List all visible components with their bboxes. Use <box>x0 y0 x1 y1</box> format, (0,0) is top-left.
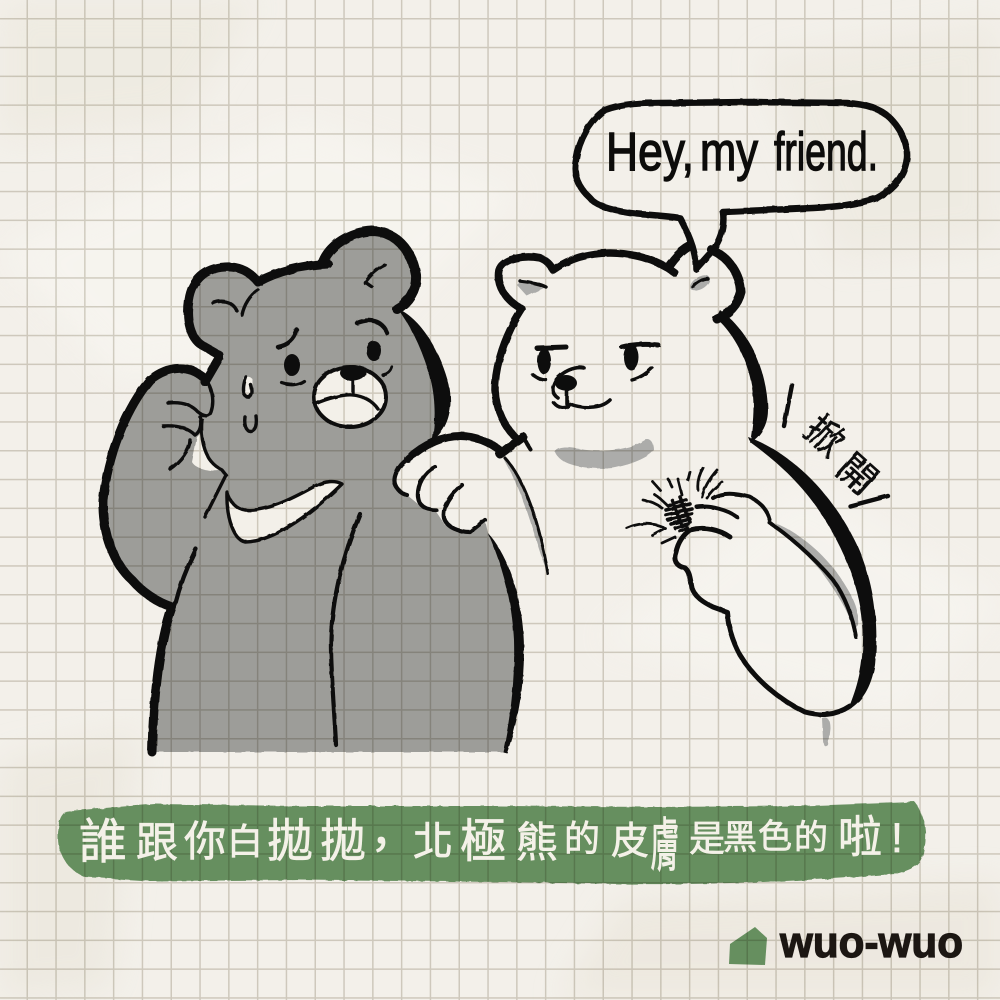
mouth <box>315 376 378 409</box>
caption text: 拋 <box>267 815 313 867</box>
speech bubble text: my <box>700 122 758 182</box>
tears <box>244 377 256 431</box>
ear marks <box>520 279 708 287</box>
caption text: 你 <box>184 818 226 865</box>
forearm thin line <box>505 458 548 574</box>
inner ear strokes <box>213 265 385 315</box>
caption text: 拋 <box>320 815 366 867</box>
logo house icon <box>729 927 767 965</box>
caption text: 熊 <box>516 819 558 866</box>
caption text: 是 <box>689 818 725 859</box>
arm tie line <box>500 437 523 454</box>
eye creases <box>533 368 652 380</box>
nose <box>555 375 577 391</box>
sound effect text: 掀 <box>796 408 852 465</box>
pulled chest hair scribble <box>666 497 692 531</box>
black bear line art <box>103 231 524 753</box>
speech bubble outline <box>575 102 907 269</box>
raised arm and body left outline <box>103 368 203 752</box>
left ear and head outline <box>495 253 675 440</box>
caption text: 誰 <box>79 816 127 869</box>
fist fingers <box>697 494 856 637</box>
right ear <box>670 246 741 319</box>
hand top thick line <box>408 436 502 459</box>
muzzle <box>314 367 386 427</box>
caption text: ! <box>891 814 903 861</box>
eyes <box>537 344 638 374</box>
sound effect text: 開 <box>828 446 884 503</box>
left ear <box>188 264 328 382</box>
belly and armpit lines <box>175 514 360 745</box>
speech bubble text: Hey, <box>606 122 694 182</box>
arm tick <box>523 437 531 450</box>
brows <box>537 344 658 348</box>
caption text: 黑 <box>723 819 757 857</box>
caption text: 的 <box>794 819 828 857</box>
green caption banner shape <box>58 802 926 884</box>
right ear <box>323 231 416 309</box>
fist fingers <box>163 377 226 517</box>
head right thick outline <box>716 310 768 443</box>
body right thick outline <box>488 533 524 753</box>
caption text: 膚 <box>650 813 680 879</box>
white bear line art <box>395 246 888 714</box>
caption text: 的 <box>564 818 600 859</box>
caption text: 極 <box>460 815 506 867</box>
caption text: 北 <box>413 820 453 864</box>
caption text: 跟 <box>136 819 178 866</box>
eye creases <box>282 367 392 385</box>
white patches: chest crescent, hand gap, muzzle <box>192 367 386 542</box>
chest crescent outline <box>227 482 342 542</box>
arm bottom outline <box>675 528 850 714</box>
speech bubble text <box>606 122 878 182</box>
head right thick outline <box>398 309 451 441</box>
caption text: ， <box>359 821 403 870</box>
nose <box>340 365 366 381</box>
radiating hair strokes <box>627 468 722 543</box>
caption text: 色 <box>758 818 792 856</box>
black bear grey body fill <box>103 231 520 752</box>
grey shading on white bear <box>503 272 858 746</box>
muzzle and mouth <box>553 368 610 408</box>
action tick marks <box>784 385 888 506</box>
caption text: 皮 <box>611 821 649 863</box>
speech bubble text: friend. <box>774 122 878 182</box>
pawing hand <box>395 459 485 532</box>
caption text: 白 <box>227 821 263 862</box>
right arm thick outline <box>748 437 876 710</box>
eyes <box>284 341 382 376</box>
eyebrows <box>278 320 387 347</box>
caption text <box>79 813 903 879</box>
logo wordmark: wuo-wuo <box>779 918 963 967</box>
caption text: 啦 <box>838 813 882 862</box>
